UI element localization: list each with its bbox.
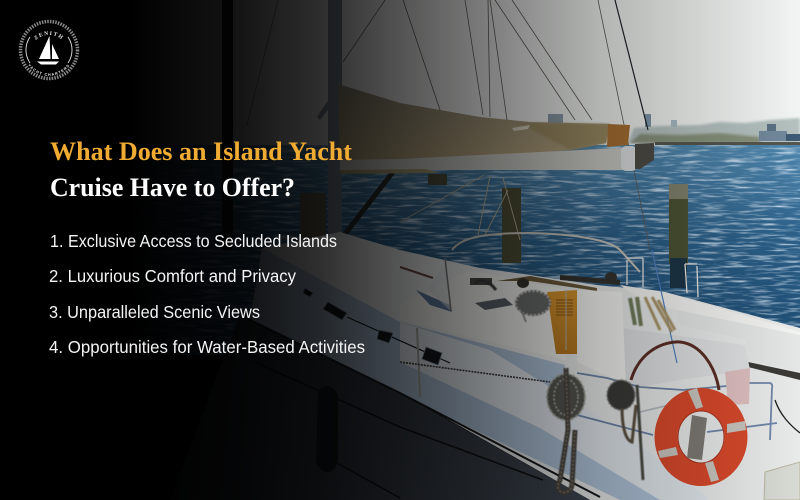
photo: steering wheel — [631, 342, 719, 390]
photo: sky — [0, 0, 800, 150]
photo: rigging lines — [247, 0, 650, 250]
photo: hull stanchion — [417, 328, 420, 397]
list item 1: 1. Exclusive Access to Secluded Islands — [50, 231, 337, 251]
photo: guard rails on the stern — [577, 258, 777, 440]
photo: sunlit side deck — [400, 322, 710, 500]
photo: rail above the deck — [452, 233, 640, 272]
photo: wooden companionway hatch — [547, 290, 577, 354]
photo: cabin details and hatch — [416, 255, 566, 350]
photo: vang strut — [342, 168, 396, 238]
photo: blue backstay — [652, 250, 677, 363]
photo: mooring pilings — [300, 174, 688, 288]
photo: furled sail cover and boom — [338, 84, 654, 174]
heading line: gold: What Does an Island Yacht — [50, 137, 352, 166]
photo: dark lower hull — [170, 315, 590, 500]
icon: orange life ring — [658, 388, 746, 482]
photo: pink utility box — [725, 368, 750, 405]
list item 3: 3. Unparalleled Scenic Views — [49, 302, 260, 322]
heading line: white: Cruise Have to Offer? — [50, 173, 295, 202]
photo: bottom right locker — [764, 462, 800, 500]
list item 2: 2. Luxurious Comfort and Privacy — [49, 266, 296, 286]
photo: winches and deck gear — [470, 272, 620, 288]
photo: masts — [222, 0, 342, 250]
benefits list — [49, 231, 365, 357]
photo: upper hull band — [250, 248, 700, 500]
logo: Zenith Yacht Charters badge: ZENITH — [34, 31, 64, 40]
photo: rope coils — [475, 281, 675, 492]
photo: hull guard chain — [400, 362, 550, 382]
logo: Zenith Yacht Charters badge: YACHT CHARTERS — [28, 64, 70, 76]
heading — [50, 137, 352, 202]
photo: distant city skyline — [548, 114, 800, 146]
list item 4: 4. Opportunities for Water-Based Activities — [49, 337, 365, 357]
photo: fender — [316, 386, 338, 472]
logo: Zenith Yacht Charters badge — [18, 20, 80, 80]
photo: deck and cockpit base — [262, 232, 800, 500]
photo: black cable — [775, 400, 800, 433]
photo: hull stripes — [240, 315, 600, 498]
photo: portholes — [303, 288, 442, 365]
photo: harbour water — [0, 145, 800, 355]
